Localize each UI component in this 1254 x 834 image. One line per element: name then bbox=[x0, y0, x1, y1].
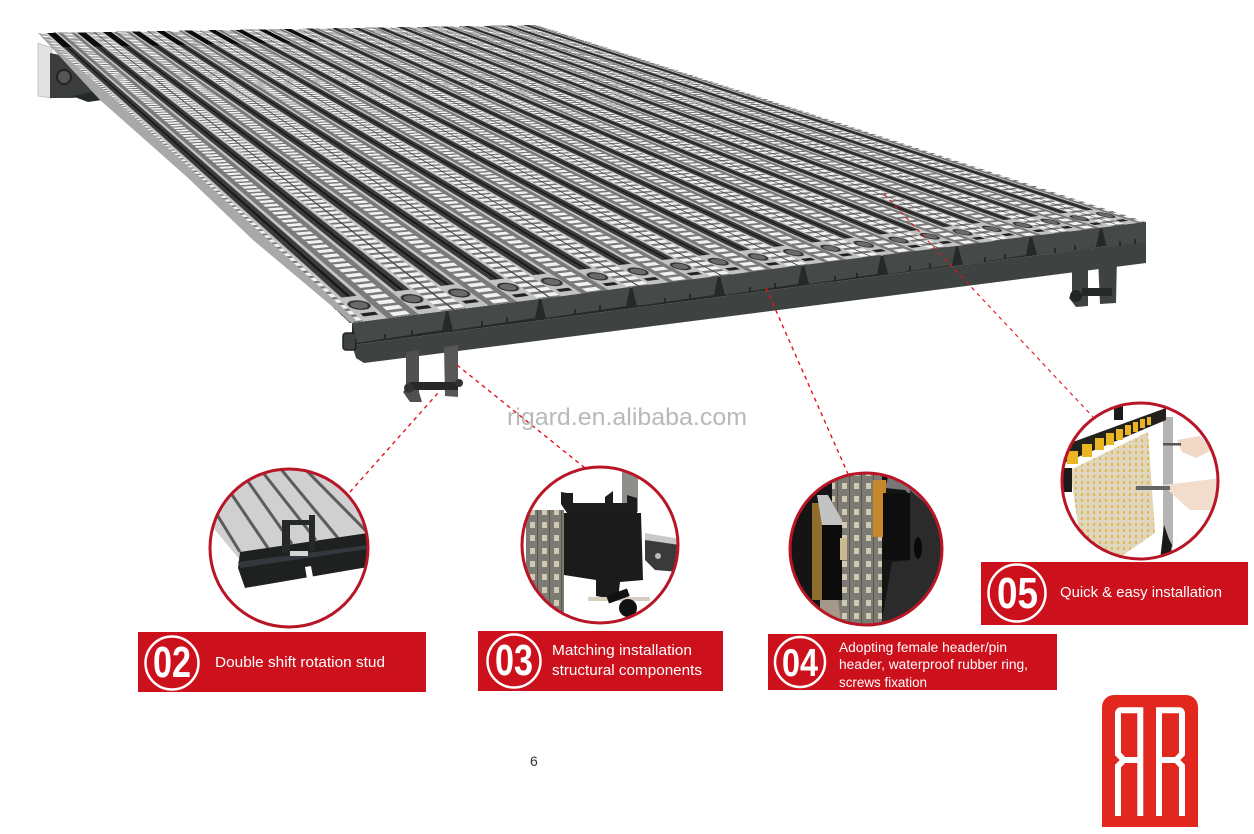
banner 04: Adopting female header/pin bbox=[839, 640, 1007, 655]
banner 05 bbox=[981, 562, 1248, 625]
logo bbox=[1102, 695, 1198, 827]
rear left mounting bracket bbox=[38, 43, 102, 102]
left hanging bracket bbox=[403, 345, 463, 402]
banner 02 bbox=[138, 632, 426, 692]
page number: 6 bbox=[530, 753, 538, 769]
front rail with module blocks bbox=[343, 222, 1146, 363]
banner 02: Double shift rotation stud bbox=[215, 655, 385, 671]
detail circle: female header connector bbox=[788, 472, 944, 626]
number badge 04: 04 bbox=[782, 642, 818, 685]
number badge 05: 05 bbox=[997, 569, 1038, 618]
right hanging bracket bbox=[1069, 256, 1117, 307]
banner 04: header, waterproof rubber ring, bbox=[839, 657, 1028, 672]
detail circle: installation components bbox=[520, 466, 680, 624]
watermark: rigard.en.alibaba.com bbox=[507, 404, 747, 431]
banner 03: Matching installation bbox=[552, 643, 692, 659]
banner 04 bbox=[768, 634, 1057, 690]
LED panel surface bbox=[38, 25, 1145, 323]
dashed leader lines bbox=[350, 194, 1093, 492]
banner 03: structural components bbox=[552, 663, 702, 679]
detail circle: rotation stud bbox=[208, 468, 370, 628]
banner 03 bbox=[478, 631, 723, 691]
left edge rail of panel bbox=[40, 35, 356, 323]
detail circle: quick installation bbox=[1060, 402, 1220, 560]
number badge 02: 02 bbox=[153, 638, 191, 687]
banner 05: Quick & easy installation bbox=[1060, 585, 1222, 601]
number badge 03: 03 bbox=[495, 636, 533, 685]
banner 04: screws fixation bbox=[839, 675, 927, 690]
